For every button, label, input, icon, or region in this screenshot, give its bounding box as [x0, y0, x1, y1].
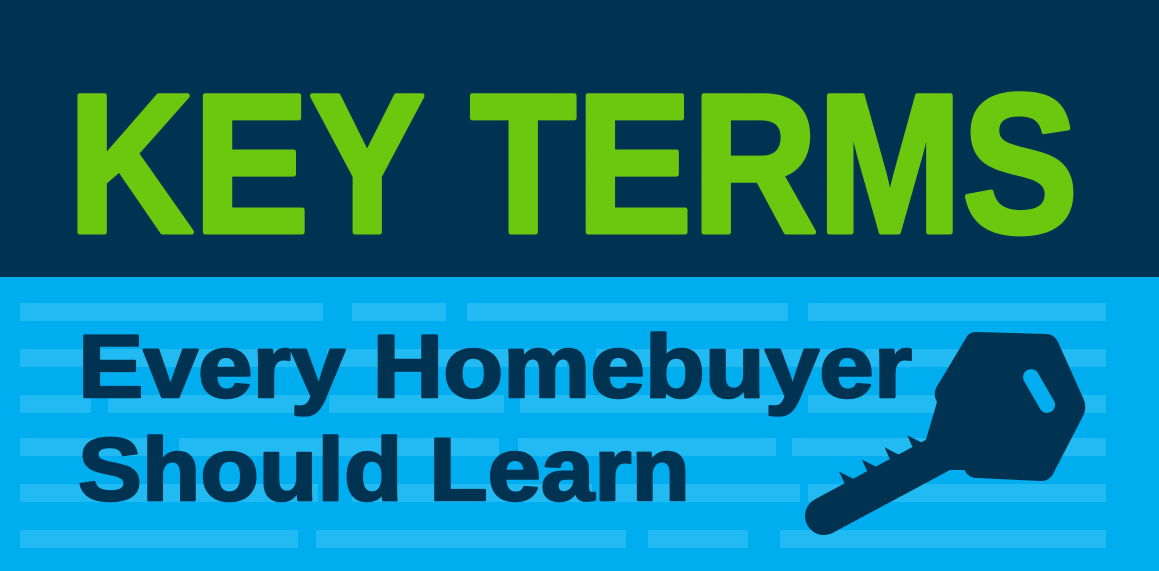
subtitle: Every Homebuyer [78, 316, 912, 416]
icon: key [824, 332, 1085, 516]
bottom panel: light blue background [0, 277, 1159, 571]
subtitle: Should Learn [78, 419, 690, 519]
top panel: dark navy band [0, 0, 1159, 277]
subtitle [78, 316, 912, 519]
key hole [1020, 366, 1058, 416]
